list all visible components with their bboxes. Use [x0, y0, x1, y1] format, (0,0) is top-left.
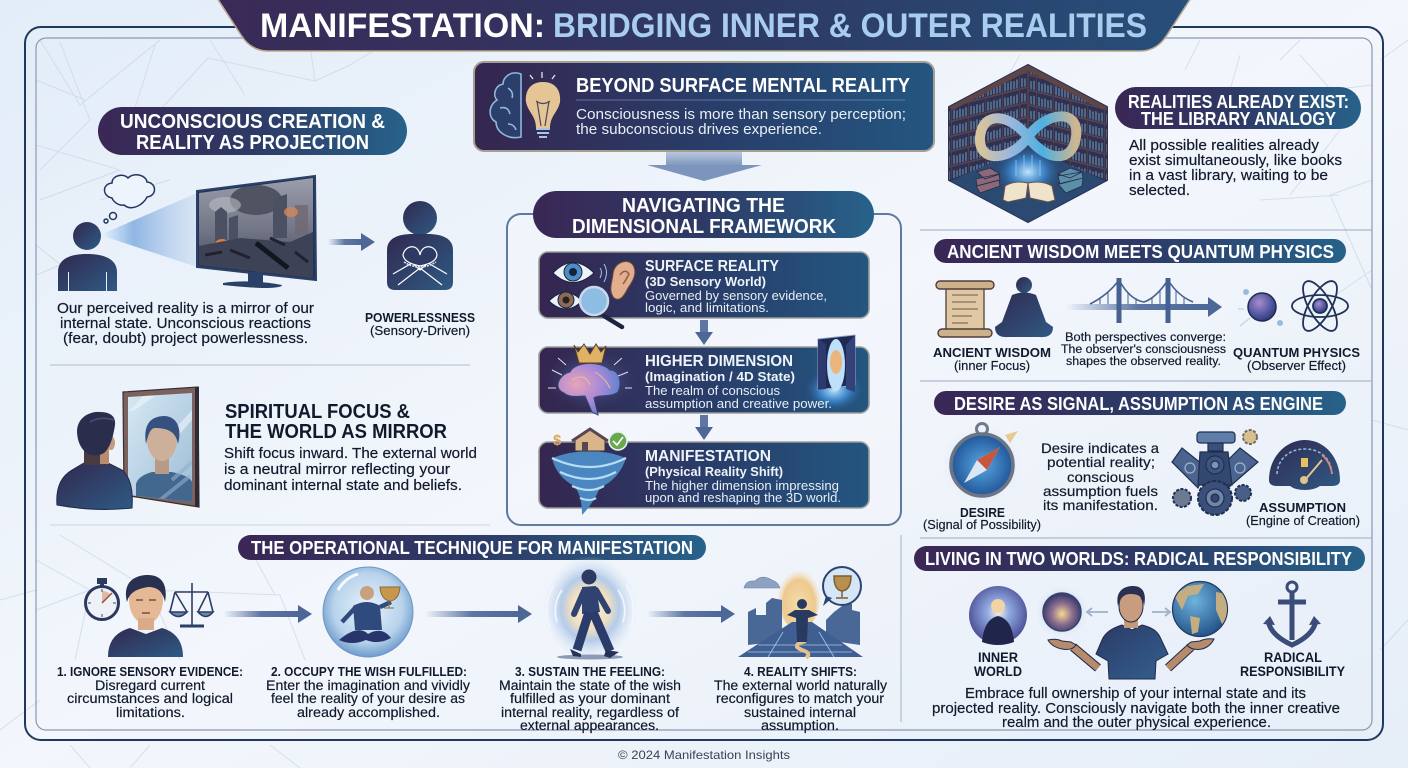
- icon: calm person: [108, 575, 183, 657]
- heading: spiritual focus: [225, 401, 448, 443]
- body text: the subconscious drives experience.: [576, 121, 822, 138]
- label: radical responsibility: RADICAL: [1264, 650, 1322, 665]
- icon: inner orb: [1035, 585, 1089, 639]
- label: assumption: [1246, 500, 1360, 528]
- arrow: [695, 320, 713, 345]
- card: surface reality: [539, 252, 869, 327]
- heading pill: NAVIGATING THE: [622, 195, 785, 217]
- icon: city shift with trophy bubble: [738, 566, 863, 658]
- label: quantum physics: (Observer Effect): [1247, 359, 1346, 373]
- card text: Governed by sensory evidence,: [645, 288, 827, 303]
- text: shift focus inward: is a neutral mirror reflecting your: [224, 462, 450, 478]
- icon: scales: [170, 583, 213, 626]
- icon: stopwatch: [86, 578, 118, 620]
- text: desire indicates: conscious: [1067, 469, 1134, 485]
- text: reality is a mirror: internal state. Unconscious reactions: [60, 316, 311, 332]
- icon: meditating figure: [995, 277, 1053, 337]
- icon: person silhouette: [58, 222, 117, 291]
- step 4 text: 4. REALITY SHIFTS:: [744, 665, 857, 679]
- icon: brain with crown: [542, 344, 642, 415]
- arrow: big down: [647, 152, 762, 181]
- step 2 text: Enter the imagination and vividly: [266, 678, 470, 693]
- step 3 text: Maintain the state of the wish: [499, 678, 681, 693]
- body text: [1129, 138, 1342, 199]
- arrow: [223, 605, 312, 623]
- card: higher dimension: [539, 335, 869, 415]
- icon: eyes, ear, magnifier: [549, 262, 635, 327]
- heading: BEYOND SURFACE MENTAL REALITY: [576, 75, 911, 97]
- step 1 text: circumstances and logical: [67, 691, 233, 706]
- icon: library hexagon with infinity: [949, 65, 1107, 224]
- icon: man seen from behind: [57, 412, 132, 509]
- panel: unconscious creation: [57, 107, 475, 347]
- card text: upon and reshaping the 3D world.: [645, 490, 841, 505]
- icon: engine with gears: [1172, 430, 1258, 515]
- heading pill: UNCONSCIOUS CREATION &: [120, 111, 385, 133]
- heading pill: THE OPERATIONAL TECHNIQUE FOR MANIFESTATION: [251, 538, 693, 558]
- arrow: [647, 605, 735, 623]
- label: radical responsibility: [1240, 650, 1345, 679]
- icon: sphere with meditator: [323, 567, 413, 657]
- icon: anchor: [1263, 582, 1321, 645]
- panel: library analogy: [949, 65, 1361, 224]
- step 1 text: limitations.: [116, 705, 185, 720]
- card text: The higher dimension impressing: [645, 478, 839, 493]
- text: desire indicates: [1041, 440, 1159, 513]
- step 3 text: fulfilled as your dominant: [510, 691, 670, 706]
- footer: © 2024 Manifestation Insights: [618, 748, 790, 762]
- panel: living in two worlds: [914, 546, 1365, 731]
- heading pill: DIMENSIONAL FRAMEWORK: [572, 216, 837, 238]
- label: quantum physics: [1233, 345, 1360, 373]
- text: shift focus inward: [224, 446, 477, 494]
- arrow: [425, 605, 532, 623]
- icon: brain: [490, 73, 521, 138]
- arrow: [695, 415, 713, 440]
- icon: globe: [1172, 582, 1232, 636]
- step 1 text: 1. IGNORE SENSORY EVIDENCE:: [57, 665, 243, 679]
- label: desire: [923, 505, 1041, 532]
- icon: thought cloud: [104, 175, 154, 223]
- step 4 text: [714, 665, 887, 733]
- card text: (3D Sensory World): [645, 274, 766, 289]
- step 4 text: assumption.: [761, 718, 839, 733]
- body text: All possible realities already: [1129, 138, 1320, 154]
- icon: gauge: [1269, 440, 1340, 490]
- label: inner world: INNER: [978, 650, 1018, 665]
- body text: Consciousness is more than sensory perception;: [576, 106, 906, 123]
- panel: desire and assumption: [923, 391, 1360, 532]
- step 3 text: external appearances.: [520, 718, 659, 733]
- body text: [576, 106, 906, 138]
- text: both perspectives converge: shapes the observed reality.: [1066, 356, 1221, 368]
- label: powerlessness: (Sensory-Driven): [370, 324, 470, 338]
- icon: bound person: [387, 201, 453, 290]
- heading pill: [98, 107, 407, 155]
- card text: The realm of conscious: [645, 383, 780, 398]
- heading pill: [1115, 87, 1361, 129]
- title text: MANIFESTATION:: [260, 7, 545, 45]
- heading pill: REALITY AS PROJECTION: [136, 132, 369, 154]
- panel: dimensional framework: [507, 191, 901, 525]
- text: desire indicates: potential reality;: [1047, 454, 1155, 470]
- step 3 text: internal reality, regardless of: [501, 705, 679, 720]
- card text: SURFACE REALITY: [645, 258, 779, 275]
- step 1 text: [57, 665, 243, 720]
- icon: mirror: [123, 387, 199, 507]
- text: shift focus inward: dominant internal state and beliefs.: [224, 478, 462, 494]
- text: reality is a mirror: (fear, doubt) project powerlessness.: [63, 331, 308, 347]
- icon: atom: [1292, 276, 1348, 336]
- text: reality is a mirror: [57, 301, 314, 347]
- body text: exist simultaneously, like books: [1129, 153, 1342, 169]
- card: manifestation: [539, 429, 869, 515]
- heading: spiritual focus: SPIRITUAL FOCUS &: [225, 401, 410, 423]
- icon: bridge arrow: [1066, 278, 1222, 323]
- step 3 text: [499, 665, 681, 733]
- card text: [645, 448, 841, 505]
- label: desire: (Signal of Possibility): [923, 518, 1041, 532]
- panel: ancient wisdom meets quantum physics: [933, 239, 1360, 373]
- text: both perspectives converge: [1061, 332, 1226, 368]
- text: desire indicates: Desire indicates a: [1041, 440, 1159, 456]
- body text: projected reality. Consciously navigate both the inner creative: [932, 701, 1340, 717]
- card text: MANIFESTATION: [645, 448, 771, 465]
- card text: assumption and creative power.: [645, 396, 832, 411]
- icon: walking figure: [543, 556, 637, 660]
- title text: BRIDGING INNER & OUTER REALITIES: [553, 7, 1147, 45]
- icon: person with open hands: [1048, 586, 1214, 679]
- step 2 text: [266, 665, 470, 720]
- card text: [645, 353, 832, 411]
- card text: [645, 258, 827, 315]
- label: desire: DESIRE: [960, 505, 1005, 520]
- card text: logic, and limitations.: [645, 300, 769, 315]
- panel: beyond surface mental reality: [474, 62, 934, 151]
- heading pill: THE LIBRARY ANALOGY: [1141, 108, 1337, 129]
- text: both perspectives converge: The observer's consciousness: [1061, 344, 1226, 356]
- text: desire indicates: assumption fuels: [1043, 483, 1158, 499]
- label: radical responsibility: RESPONSIBILITY: [1240, 664, 1345, 679]
- label: quantum physics: QUANTUM PHYSICS: [1233, 345, 1360, 360]
- body text: [932, 686, 1340, 731]
- icon: monitor with ruined city: [197, 176, 316, 288]
- step 4 text: sustained internal: [744, 705, 856, 720]
- heading pill: ANCIENT WISDOM MEETS QUANTUM PHYSICS: [947, 242, 1334, 262]
- label: powerlessness: POWERLESSNESS: [365, 310, 475, 325]
- heading pill: DESIRE AS SIGNAL, ASSUMPTION AS ENGINE: [954, 394, 1323, 414]
- icon: projection beam: [100, 193, 197, 267]
- icon: lightbulb: [526, 72, 560, 137]
- arrow: [328, 233, 375, 251]
- label: assumption: (Engine of Creation): [1246, 514, 1360, 528]
- step 2 text: already accomplished.: [297, 705, 440, 720]
- text: shift focus inward: Shift focus inward. The external world: [224, 446, 477, 462]
- panel: spiritual focus: [57, 387, 477, 509]
- card text: HIGHER DIMENSION: [645, 353, 793, 370]
- label: assumption: ASSUMPTION: [1259, 500, 1346, 515]
- icon: glowing door: [804, 335, 864, 412]
- heading: spiritual focus: THE WORLD AS MIRROR: [225, 421, 448, 443]
- text: both perspectives converge: Both perspectives converge:: [1065, 332, 1226, 344]
- card text: (Imagination / 4D State): [645, 369, 795, 384]
- icon: scroll: [936, 281, 994, 337]
- icon: inner world: [969, 586, 1027, 645]
- heading pill: REALITIES ALREADY EXIST:: [1128, 91, 1349, 112]
- step 3 text: 3. SUSTAIN THE FEELING:: [515, 665, 665, 679]
- title banner: [217, 0, 1191, 51]
- body text: in a vast library, waiting to be: [1129, 168, 1328, 184]
- label: ancient wisdom: [933, 345, 1051, 373]
- heading pill: [533, 191, 874, 238]
- title text: [260, 7, 1147, 45]
- card text: (Physical Reality Shift): [645, 464, 783, 479]
- arrows: left and right: [1087, 608, 1170, 616]
- label: ancient wisdom: ANCIENT WISDOM: [933, 345, 1051, 360]
- text: reality is a mirror: Our perceived reality is a mirror of our: [57, 301, 314, 317]
- label: powerlessness: [365, 310, 475, 338]
- heading pill: LIVING IN TWO WORLDS: RADICAL RESPONSIBILITY: [925, 549, 1352, 569]
- label: ancient wisdom: (inner Focus): [954, 359, 1030, 373]
- panel: operational technique: [57, 535, 887, 733]
- step 1 text: Disregard current: [95, 678, 205, 693]
- icon: tornado with house: [552, 429, 627, 515]
- step 2 text: 2. OCCUPY THE WISH FULFILLED:: [271, 665, 467, 679]
- step 2 text: feel the reality of your desire as: [271, 691, 465, 706]
- step 4 text: The external world naturally: [714, 678, 887, 693]
- body text: Embrace full ownership of your internal state and its: [965, 686, 1306, 702]
- label: inner world: [974, 650, 1022, 679]
- icon: compass: [942, 424, 1022, 505]
- label: inner world: WORLD: [974, 664, 1022, 679]
- icon: tornado with house: $: [553, 432, 562, 449]
- body text: realm and the outer physical experience.: [1002, 715, 1271, 731]
- text: desire indicates: its manifestation.: [1043, 497, 1158, 513]
- body text: selected.: [1129, 183, 1190, 199]
- step 4 text: reconfigures to match your: [716, 691, 885, 706]
- icon: orb with particles: [1238, 289, 1283, 326]
